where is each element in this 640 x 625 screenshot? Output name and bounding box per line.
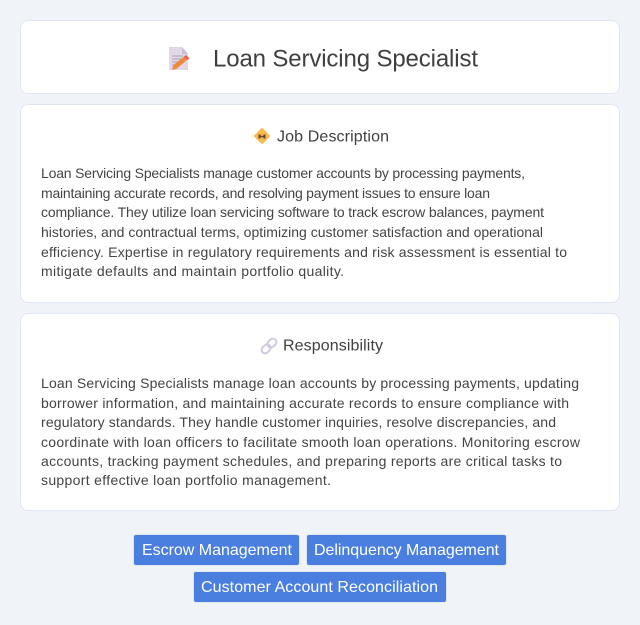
heading: job description: mitigate defaults and maintain portfolio quality. (41, 263, 344, 279)
icon: orange diamond (254, 128, 270, 144)
heading: responsibility: accounts, tracking payment schedules, and preparing reports are critical tasks to (41, 453, 562, 469)
heading: job description: Loan Servicing Specialists manage customer accounts by processing payments, (41, 165, 525, 181)
heading: job description: Job Description (277, 128, 389, 146)
tag: escrow management (133, 534, 300, 566)
icon: chain link (260, 338, 278, 354)
heading: responsibility: borrower information, and maintaining accurate records to ensure compliance with (41, 395, 569, 411)
heading: responsibility: Loan Servicing Specialists manage loan accounts by processing payments, updating (41, 375, 579, 391)
panel: job description (20, 104, 620, 303)
icon: document with pencil (169, 47, 190, 70)
tag: customer account reconciliation: Customer Account Reconciliation (201, 579, 438, 596)
tag: escrow management: Escrow Management (142, 542, 293, 559)
panel: header card (20, 20, 620, 94)
heading: responsibility: regulatory standards. They handle customer inquiries, resolve discrepancies, and (41, 414, 556, 430)
heading: job description: efficiency. Expertise in regulatory requirements and risk assessment is essential to (41, 244, 567, 260)
tag: customer account reconciliation (193, 571, 447, 603)
heading: responsibility: coordinate with loan officers to facilitate smooth loan operations. Monitoring escrow (41, 434, 581, 450)
heading: responsibility: Responsibility (283, 338, 383, 354)
panel: responsibility (20, 313, 620, 511)
heading: responsibility: support effective loan portfolio management. (41, 472, 331, 488)
heading: job description: compliance. They utilize loan servicing software to track escrow balances, payment (41, 204, 544, 220)
tag: delinquency management: Delinquency Management (314, 542, 500, 559)
heading: job description: maintaining accurate records, and resolving payment issues to ensure loan (41, 185, 490, 201)
heading: job description: histories, and contractual terms, optimizing customer satisfaction and operational (41, 224, 543, 240)
heading: job description (41, 128, 567, 279)
heading: responsibility (41, 338, 581, 488)
tag: delinquency management (306, 534, 507, 566)
title: Loan Servicing Specialist (213, 46, 478, 72)
